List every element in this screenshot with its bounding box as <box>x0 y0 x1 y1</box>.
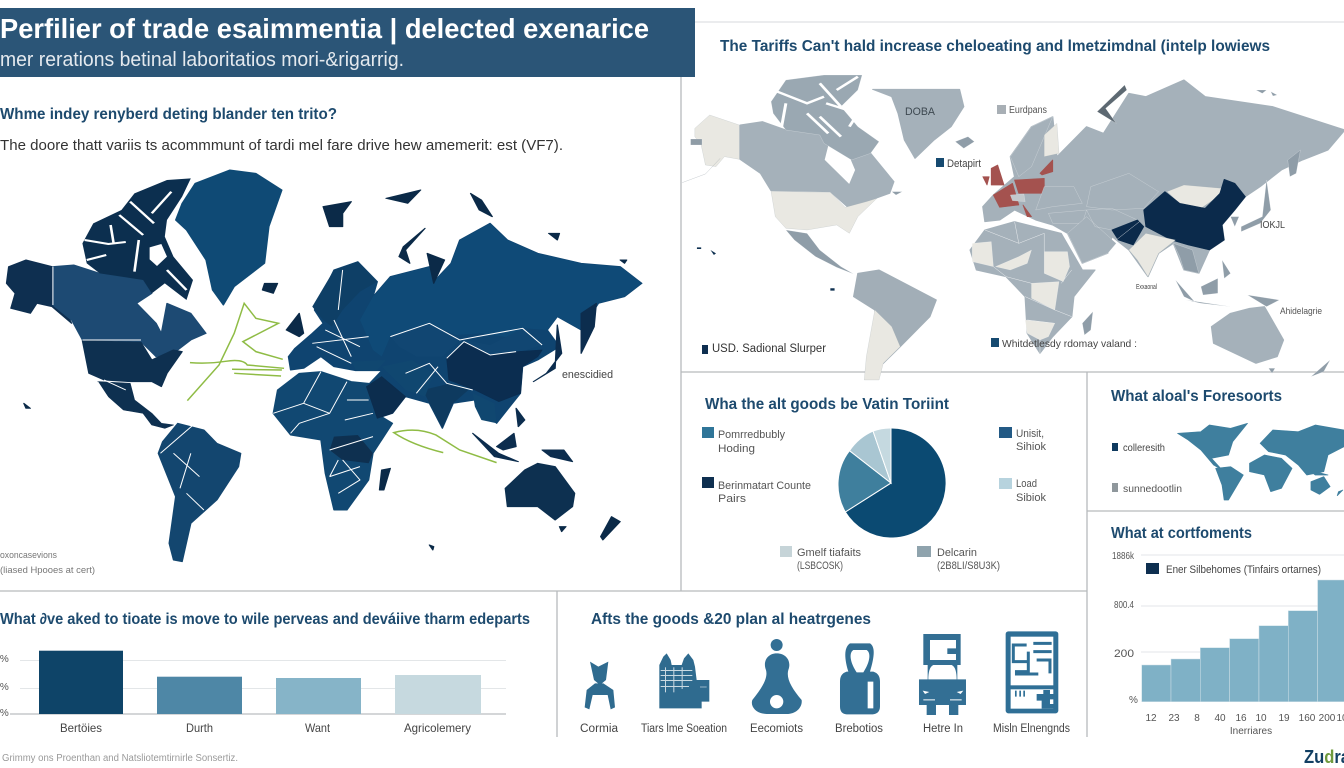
pie legend: Sibiok <box>1016 492 1046 504</box>
panel: rising bar chart <box>1111 525 1344 737</box>
map annotation: enescidied <box>562 369 613 381</box>
icon labels: Eecomiots <box>750 723 803 735</box>
bars <box>39 651 481 714</box>
y axis labels <box>0 654 9 719</box>
legend: Eurdpans <box>997 105 1047 116</box>
icon: vehicle <box>919 634 966 715</box>
chart x labels <box>1145 713 1344 737</box>
icon: kettlebell <box>840 643 880 714</box>
chart x labels: 23 <box>1168 713 1180 724</box>
chart y axis: 1886k <box>1112 551 1135 562</box>
world map: dark blue countries <box>7 170 642 562</box>
pie legend: Pomrredbubly <box>718 429 785 441</box>
pie legend: Load <box>1016 478 1037 490</box>
title: Perfilier of trade esaimmentia | delected exenarice <box>0 13 649 44</box>
panel: pie chart <box>702 396 1046 572</box>
chart legend: Ener Silbehomes (Tinfairs ortarnes) <box>1166 564 1321 576</box>
footer source note: Grimmy ons Proenthan and Natsliotemtirnirle Sonsertiz. <box>2 753 238 764</box>
map label: DOBA: DOBA <box>905 106 936 118</box>
panel: main world map <box>0 106 642 576</box>
bar labels: Want <box>305 721 331 735</box>
icon labels: Hetre In <box>923 723 963 735</box>
map legend note <box>0 550 95 576</box>
icon labels: Tiars lme Soeation <box>641 723 727 735</box>
pie legend <box>702 427 1046 572</box>
map label: IOKJL: IOKJL <box>1260 220 1285 231</box>
icon labels <box>580 723 1070 735</box>
bar labels: Bertöies <box>60 721 102 735</box>
chart y axis <box>1112 551 1344 706</box>
tariff map heading: The Tariffs Can't hald increase cheloeating and lmetzimdnal (intelp lowiews <box>720 38 1270 55</box>
pie legend: Sihiok <box>1016 441 1046 453</box>
pie legend: Berinmatart Counte <box>718 480 811 492</box>
chart x labels: 200 <box>1319 713 1336 724</box>
panel: sector bar chart <box>0 611 530 735</box>
pie legend: Pairs <box>718 493 747 505</box>
map label: Ahidelagrie: Ahidelagrie <box>1280 306 1322 317</box>
icon: chair <box>585 662 615 709</box>
panel: forecasts mini map <box>1111 388 1344 500</box>
pie chart <box>838 428 946 538</box>
mini legend: colleresith <box>1123 443 1165 454</box>
icon: maze panel <box>1006 631 1058 713</box>
chart y axis: 200 <box>1114 648 1134 660</box>
chart x labels: 8 <box>1194 713 1200 724</box>
icon labels: Brebotios <box>835 723 883 735</box>
mini legend: sunnedootlin <box>1123 484 1182 495</box>
legend: USD Sadional Slurper: USD. Sadional Slurper <box>712 343 826 355</box>
chart x labels: 19 <box>1278 713 1290 724</box>
pie heading: Wha the alt goods be Vatin Toriint <box>705 396 949 413</box>
chart y axis: % <box>1129 695 1138 706</box>
bar labels: Durth <box>186 721 213 735</box>
map heading: Whme indey renyberd deting blander ten trito? <box>0 106 337 123</box>
mini map heading: What aloal's Foresoorts <box>1111 388 1282 405</box>
chart x labels: 12 <box>1145 713 1157 724</box>
chart x labels: 10 <box>1255 713 1267 724</box>
icon: city tower <box>659 653 709 708</box>
green trade route arrows <box>187 303 497 463</box>
map legend note: oxoncasevions <box>0 550 57 561</box>
chart heading: What at cortfoments <box>1111 525 1252 542</box>
pie legend: Unisit, <box>1016 428 1044 440</box>
pie legend: Hoding <box>718 443 755 455</box>
chart x labels: Inerriares <box>1230 726 1272 737</box>
legend: Whitdetlesdy: Whitdetlesdy rdomay valand : <box>1002 338 1137 350</box>
mini legend <box>1112 443 1182 495</box>
legend: Eurdpans: Eurdpans <box>1009 105 1047 116</box>
legend: Detapirt: Detapirt <box>947 158 981 170</box>
chart x labels: 16 <box>1235 713 1247 724</box>
chart bars <box>1142 580 1344 702</box>
chart y axis: 800.4 <box>1114 600 1134 611</box>
mini world map <box>1178 423 1344 500</box>
pie legend: (LSBCOSK) <box>797 560 843 572</box>
icon: person <box>752 639 802 714</box>
map label: Exxaonal: Exxaonal <box>1136 284 1157 291</box>
icons heading: Afts the goods &20 plan al heatrgenes <box>591 611 871 628</box>
icon labels: Cormia <box>580 723 619 735</box>
icon labels: Misln Elnengnds <box>993 723 1070 735</box>
pie legend: Gmelf tiafaits <box>797 547 861 559</box>
chart x labels: 40 <box>1214 713 1226 724</box>
pie legend: Delcarin <box>937 547 977 559</box>
bar labels <box>60 721 471 735</box>
panel: icon row <box>580 611 1070 735</box>
bar labels: Agricolemery <box>404 721 471 735</box>
panel: tariff map <box>682 38 1344 380</box>
header banner <box>0 8 695 77</box>
subtitle: mer rerations betinal laboritatios mori-&rigarrig. <box>0 49 404 71</box>
chart x labels: 160 <box>1299 713 1316 724</box>
pie legend: (2B8LI/S8U3K) <box>937 560 1000 572</box>
bars heading: What ∂ve aked to tioate is move to wile perveas and deváiive tharm edeparts <box>0 611 530 628</box>
legend: Detapirt <box>936 158 981 170</box>
map legend note: (liased Hpooes at cert) <box>0 565 95 576</box>
tariff world map <box>682 75 1344 380</box>
map description: The doore thatt variis ts acommmunt of tardi mel fare drive hew amemerit: est (VF7). <box>0 137 563 154</box>
